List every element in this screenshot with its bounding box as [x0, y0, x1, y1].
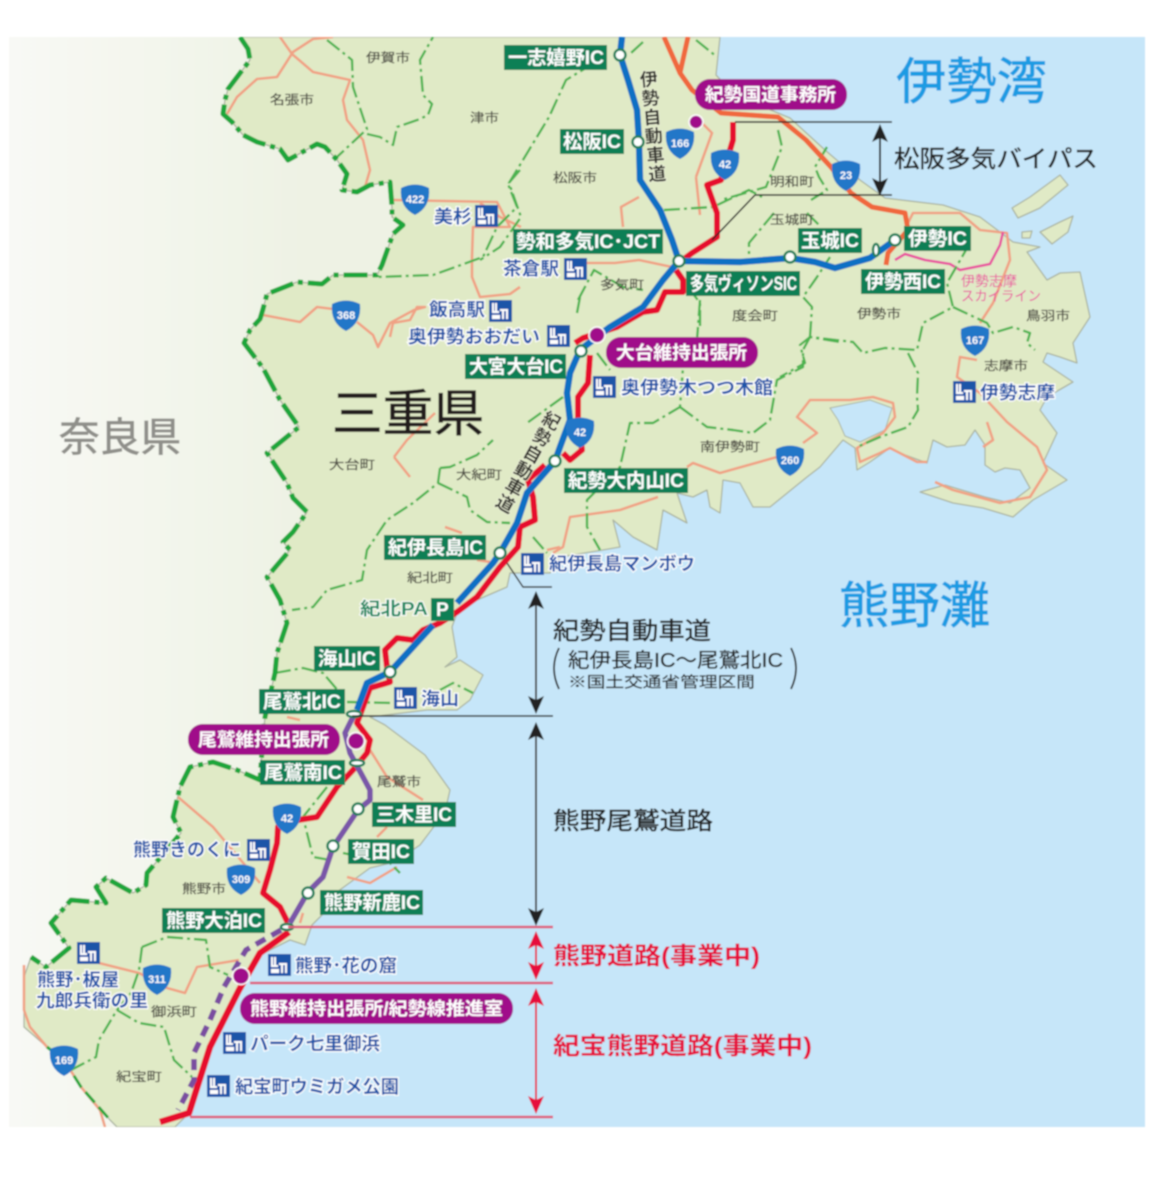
- annotation: Kumano-Owase road section: 熊野尾鷲道路: [553, 808, 713, 835]
- office location dots: [232, 115, 703, 984]
- road: blue expressways: [357, 37, 895, 710]
- title: Nara Prefecture: 奈良県: [59, 416, 181, 460]
- IC: Kiinagashima: 紀伊長島IC: [388, 537, 483, 559]
- shield 23: [832, 160, 860, 191]
- map: pink skyline road: [895, 232, 1003, 270]
- title: Mie Prefecture: 三重県: [332, 386, 484, 442]
- panel: sea background: [176, 36, 1146, 1128]
- station: Iitaka: 飯高駅: [429, 300, 485, 320]
- shield 422: [401, 184, 429, 215]
- IC: Kata: 賀田IC: [352, 841, 410, 863]
- office: Odai: 大台維持出張所: [616, 342, 747, 363]
- PA: Kihoku: [360, 598, 454, 621]
- station: Kumano Hananoiwaya: [268, 954, 397, 976]
- municipality labels: 玉城町: [770, 213, 815, 227]
- map: green municipal boundaries: [71, 37, 1035, 1077]
- municipality labels: 伊賀市: [366, 51, 410, 65]
- shield 42 south: 42: [574, 427, 586, 439]
- annotation: Kumano-Owase road section: [528, 722, 713, 926]
- municipality labels: 大紀町: [456, 468, 503, 482]
- municipality labels: 伊勢市: [857, 306, 901, 321]
- IC: Miyama: 海山IC: [318, 648, 376, 670]
- municipality labels: 尾鷲市: [377, 774, 421, 789]
- station: Kumano Hananoiwaya: 熊野･花の窟: [295, 956, 397, 976]
- station: Park Shichiri Mihama: パーク七里御浜: [250, 1034, 380, 1054]
- IC: Ise-Nishi: 伊勢西IC: [865, 271, 941, 293]
- municipality labels: 津市: [470, 111, 499, 125]
- municipality labels: 南伊勢町: [700, 439, 761, 454]
- office: Kumano: [240, 993, 513, 1024]
- label: Ise expressway: 伊勢自動車道: [637, 69, 667, 184]
- map: prefecture boundary: [31, 37, 403, 967]
- shield 368: [332, 300, 360, 331]
- annotation: Matsusaka-Taki bypass: [712, 122, 1098, 240]
- IC: Matsusaka: 松阪IC: [563, 131, 621, 153]
- road: route 42 red: [160, 122, 733, 1122]
- map: lower-left boundary: [47, 1047, 110, 1120]
- station: Okuise Mokkan: 奥伊勢木つつ木館: [621, 378, 773, 398]
- municipality labels: 度会町: [732, 308, 779, 323]
- IC: Tamaki: 玉城IC: [801, 230, 859, 252]
- shield 42 Kumano: [273, 804, 301, 834]
- station: Misugi: [434, 205, 498, 227]
- annotation: Kisei expressway section: 紀勢自動車道: [553, 618, 711, 645]
- annotation: Kisei expressway section: [352, 563, 796, 716]
- station: Miyama: 海山: [421, 689, 459, 709]
- pink skyline label: 伊勢志摩: [961, 273, 1017, 289]
- municipality labels: 明和町: [770, 175, 815, 189]
- station: Kumano Itaya: 熊野･板屋: [37, 970, 119, 990]
- interchange labels: [162, 45, 971, 933]
- office labels: [188, 79, 847, 1024]
- station: Ise-Shima: [953, 381, 1055, 403]
- station: Kumano Itaya: 九郎兵衛の里: [36, 991, 148, 1011]
- shield 42: [711, 150, 739, 180]
- station: Iitaka: [429, 300, 512, 322]
- shield 260: [776, 446, 804, 476]
- annotation: Kisei expressway section: 紀伊長島IC～尾鷲北IC: [568, 649, 783, 672]
- route shields: [50, 128, 989, 1076]
- IC: Ichishi-Ureshino: 一志嬉野IC: [508, 47, 604, 69]
- region titles: [59, 54, 1047, 634]
- shield 166: [666, 128, 694, 159]
- station: Kumano Kinokuni: 熊野きのくに: [133, 840, 241, 860]
- shield 309: 309: [232, 874, 250, 886]
- office: Owase: [188, 724, 340, 755]
- IC: Owase-Minami: 尾鷲南IC: [264, 761, 342, 784]
- panel: neighbouring land (Nara): [9, 37, 420, 1127]
- map: inner bay: [830, 400, 892, 442]
- IC: Taki Vison: 多気ヴィソンSIC: [690, 272, 797, 295]
- IC: Ise: 伊勢IC: [908, 228, 967, 250]
- IC: Kisei-Ouchiyama: 紀勢大内山IC: [568, 470, 684, 492]
- station: Oku-Ise Odai: 奥伊勢おおだい: [408, 327, 540, 347]
- annotation: Kumano road under construction: 熊野道路(事業中): [553, 943, 760, 970]
- shield 42 south: [566, 418, 594, 448]
- shield 23: 23: [840, 170, 852, 182]
- interchange markers: [281, 50, 900, 930]
- office: Kisei National Highway: 紀勢国道事務所: [705, 85, 836, 105]
- municipality labels: 鳥羽市: [1026, 308, 1070, 323]
- roadside station labels: [36, 205, 1055, 1097]
- annotation: Kiho-Kumano road under construction: [190, 988, 812, 1117]
- station: Kiho Umigame Park: 紀宝町ウミガメ公園: [235, 1077, 399, 1097]
- municipality labels: 紀北町: [407, 571, 454, 585]
- IC: Seiwa-Taki: 勢和多気IC･JCT: [516, 231, 660, 253]
- road: route 23 orange: [664, 37, 908, 265]
- shield 311: [143, 964, 171, 995]
- station: Chakura: [503, 258, 587, 280]
- station: Miyama: [394, 687, 459, 709]
- shield 260: 260: [781, 455, 799, 467]
- shield 42 Kumano: 42: [281, 813, 293, 825]
- IC: Kumano-Odomari: 熊野大泊IC: [166, 910, 262, 932]
- vertical expressway labels: [491, 69, 667, 517]
- municipality labels: 名張市: [270, 92, 314, 107]
- shield 167: [961, 326, 989, 356]
- title: Kumano Sea: 熊野灘: [839, 578, 990, 634]
- station: Kumano Itaya: [36, 942, 148, 1011]
- municipality labels: 御浜町: [151, 1004, 198, 1019]
- pink skyline label: スカイライン: [961, 288, 1041, 304]
- station: Ise-Shima: 伊勢志摩: [980, 383, 1055, 403]
- shield 166: 166: [671, 138, 689, 150]
- station: Chakura: 茶倉駅: [503, 258, 559, 279]
- municipality labels: 松阪市: [553, 171, 597, 185]
- municipality labels: [116, 51, 1070, 1084]
- IC: Kumano-Atashika: 熊野新鹿IC: [324, 892, 420, 914]
- PA: Kihoku: 紀北PA: [360, 599, 428, 619]
- shield 42: 42: [719, 159, 731, 171]
- road: purple Kumano-Owase road: [290, 713, 370, 923]
- label: Kisei expressway: 紀勢自動車道: [491, 407, 564, 517]
- title: Ise Bay: 伊勢湾: [896, 54, 1047, 110]
- office: Odai: [606, 337, 758, 368]
- road: purple dashed planned road: [178, 930, 281, 1110]
- office: Kumano: 熊野維持出張所/紀勢線推進室: [250, 999, 503, 1019]
- annotation: Kiho-Kumano road under construction: 紀宝熊野道路(事業中): [553, 1033, 812, 1060]
- shield 169: [50, 1046, 78, 1076]
- IC: Omiya-Odai: 大宮大台IC: [469, 356, 563, 378]
- IC: Owase-Kita: 尾鷲北IC: [263, 690, 341, 713]
- municipality labels: 熊野市: [182, 882, 226, 896]
- shield 167: 167: [966, 335, 984, 347]
- municipality labels: 多気町: [600, 277, 645, 292]
- shield 422: 422: [406, 194, 424, 206]
- shield 169: 169: [55, 1055, 73, 1067]
- shield 368: 368: [337, 310, 355, 322]
- annotation: Kisei expressway section: ※国土交通省管理区間: [568, 673, 755, 691]
- shield 309: [227, 864, 255, 895]
- annotation: Kumano road under construction: [250, 927, 760, 983]
- office: Kisei National Highway: [695, 79, 847, 110]
- station: Kiinagashima Manbo: 紀伊長島マンボウ: [549, 554, 695, 574]
- IC: Taki Vison: [686, 271, 800, 296]
- pink skyline label: [961, 273, 1041, 304]
- IC: Mikisato: 三木里IC: [376, 804, 452, 826]
- municipality labels: 大台町: [329, 457, 376, 472]
- PA: Kihoku: P: [436, 600, 449, 621]
- station: Misugi: 美杉: [434, 206, 472, 227]
- municipality labels: 紀宝町: [116, 1070, 163, 1084]
- shield 311: 311: [148, 974, 166, 986]
- municipality labels: 志摩市: [984, 359, 1028, 373]
- office: Owase: 尾鷲維持出張所: [198, 729, 329, 750]
- annotation: Matsusaka-Taki bypass: 松阪多気バイパス: [894, 146, 1098, 173]
